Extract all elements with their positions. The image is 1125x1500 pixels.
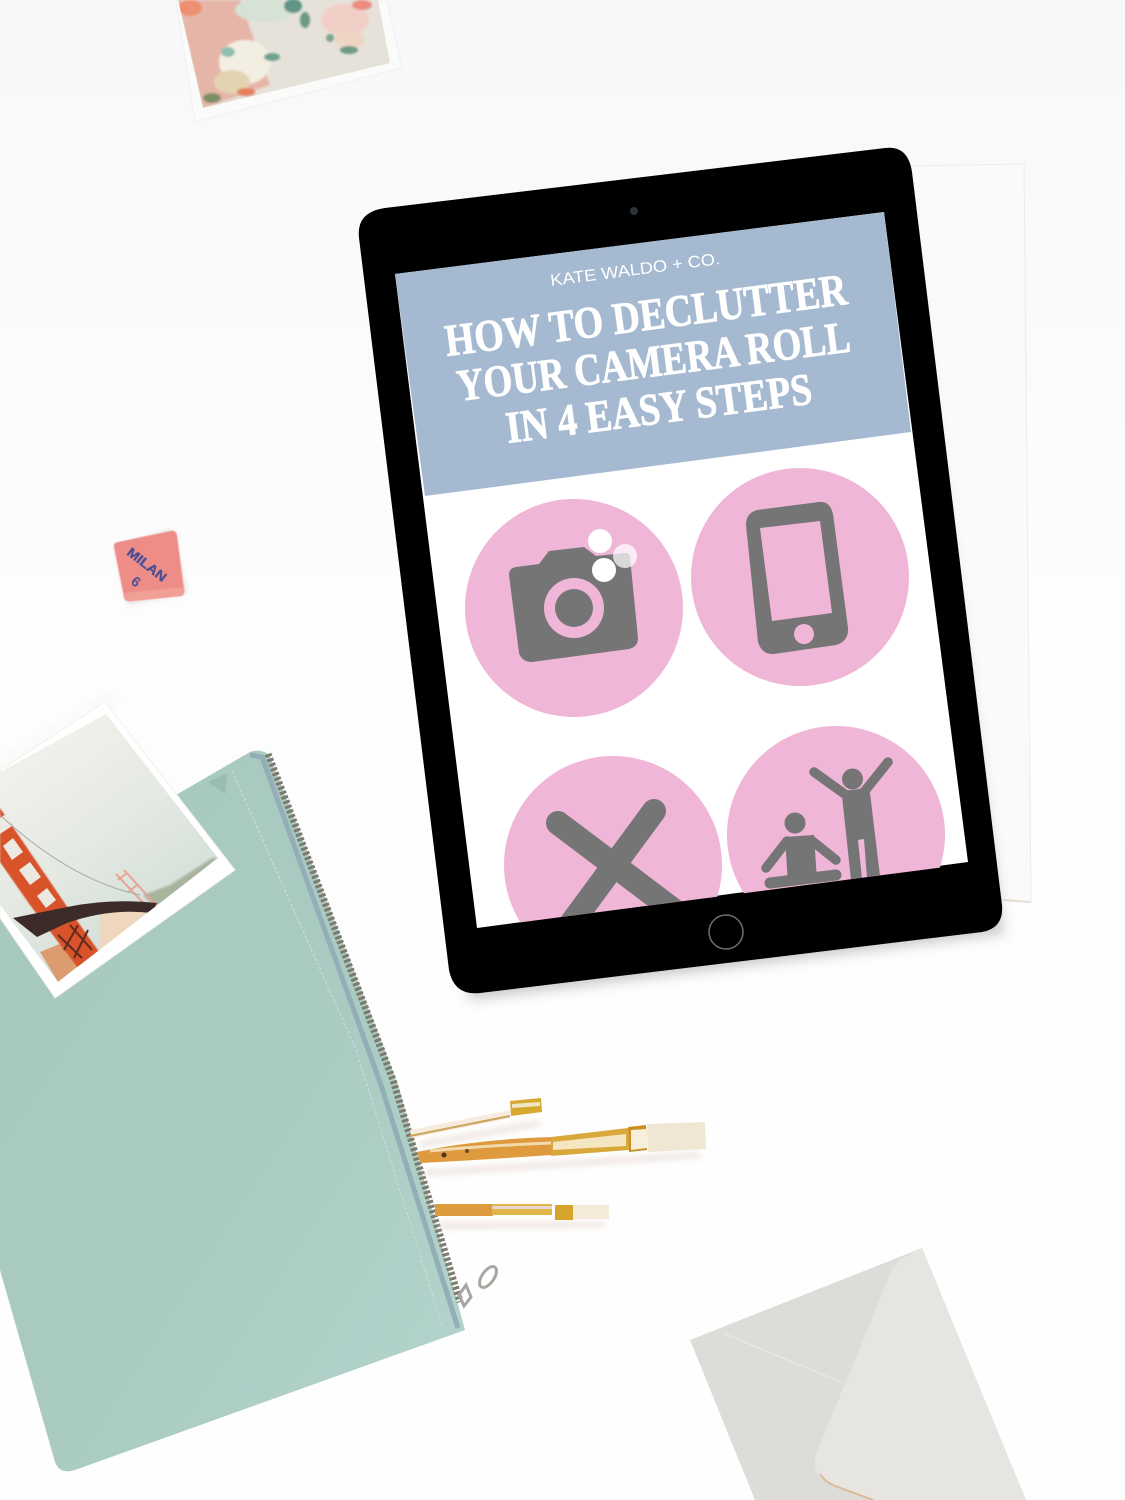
title: HOW TO DECLUTTER — [442, 264, 850, 366]
pouch tab — [208, 773, 227, 794]
pouch stitching — [232, 771, 442, 1325]
bridge deck — [13, 901, 157, 937]
pouch zipper tape — [250, 755, 458, 1328]
tablet shadow — [380, 165, 1004, 1000]
title: IN 4 EASY STEPS — [503, 364, 815, 453]
envelope fold line — [723, 1333, 843, 1383]
tower lattice — [58, 925, 92, 958]
circle icons — [465, 468, 945, 922]
icon: X mark — [504, 756, 722, 922]
header band — [395, 212, 911, 496]
suspension cable — [0, 815, 140, 895]
paper sheet behind tablet — [905, 164, 1031, 902]
paint brushes — [410, 1098, 706, 1229]
sand — [100, 904, 158, 950]
title — [442, 264, 853, 453]
zipper pull ring — [459, 1264, 500, 1306]
top photo: wedding flowers — [176, 0, 402, 122]
icon: people — [727, 726, 945, 894]
fort — [40, 943, 78, 982]
title: YOUR CAMERA ROLL — [454, 312, 853, 411]
screen — [395, 212, 968, 974]
envelope — [690, 1248, 1026, 1500]
eraser number: 6 — [128, 573, 144, 590]
bridge photo — [0, 690, 235, 998]
envelope flap — [815, 1248, 1026, 1500]
far tower — [116, 870, 157, 910]
eraser brand text: MILAN — [124, 545, 170, 585]
pouch zipper teeth — [268, 754, 460, 1302]
brand line: KATE WALDO + CO. — [549, 250, 721, 290]
icon: camera — [465, 499, 683, 717]
pouch — [0, 751, 500, 1471]
home button — [709, 915, 743, 949]
brush: thin cream handle — [410, 1098, 542, 1138]
tablet — [359, 148, 1004, 1000]
eraser — [114, 530, 186, 604]
brush: large orange handle — [417, 1122, 706, 1163]
icon: phone — [691, 468, 909, 686]
tower windows — [0, 814, 56, 908]
near tower — [0, 808, 100, 968]
brush: small orange handle — [435, 1204, 609, 1220]
far hills — [143, 858, 218, 910]
camera dot — [630, 207, 638, 215]
tablet body — [359, 148, 1002, 993]
brush shadows — [420, 1120, 700, 1229]
